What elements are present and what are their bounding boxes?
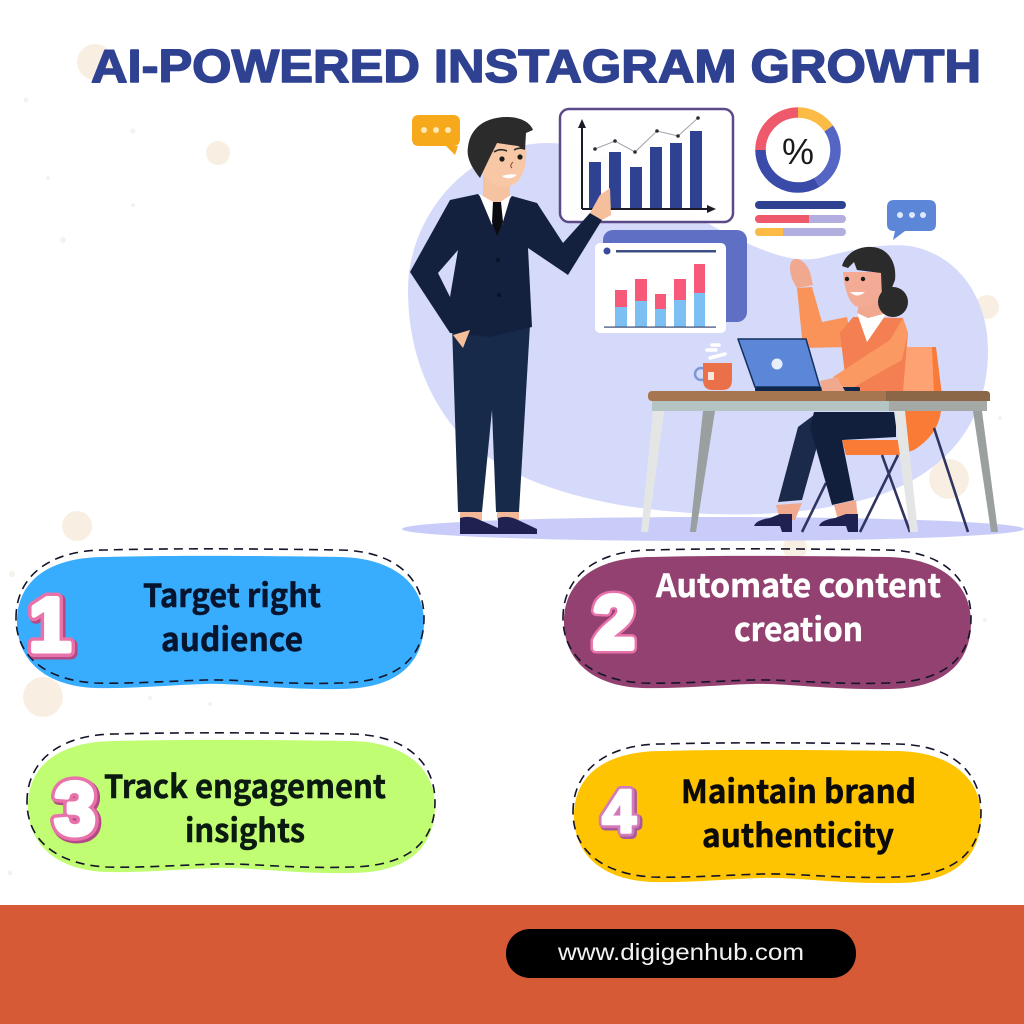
card 2: automate content creation: creation — [734, 605, 863, 651]
card 3: track engagement insights: Track engagement — [104, 762, 386, 808]
card 1: target right audience — [16, 549, 424, 689]
card 4: maintain brand authenticity — [573, 743, 981, 883]
card 1: target right audience: Target right — [143, 571, 321, 617]
progress bars — [755, 201, 846, 236]
card 2: automate content creation: 2 — [593, 581, 635, 664]
background blob — [408, 143, 988, 514]
coffee mug — [695, 345, 732, 390]
laptop — [738, 339, 860, 392]
card 4: maintain brand authenticity: 4 — [604, 780, 638, 847]
desk chair — [802, 347, 968, 532]
card 3: track engagement insights — [27, 733, 435, 873]
ground shadow — [402, 517, 1024, 541]
website pill: www.digigenhub.com — [557, 939, 804, 965]
card 4: maintain brand authenticity: Maintain brand — [681, 767, 916, 813]
speech bubble: orange — [412, 115, 460, 155]
man presenting — [410, 117, 611, 534]
bar chart with trend line — [560, 109, 733, 222]
card 2: automate content creation: Automate content — [655, 561, 941, 607]
card 3: track engagement insights: insights — [185, 806, 305, 852]
card 1: target right audience: 1 — [29, 583, 71, 668]
stacked bar chart panel — [595, 230, 747, 333]
woman at laptop — [754, 247, 908, 532]
card 2: automate content creation — [563, 549, 971, 689]
illustration: presenter and analyst with charts — [402, 109, 1024, 541]
card 1: target right audience: 1 — [29, 583, 71, 668]
footer band — [0, 905, 1024, 1024]
card 4: maintain brand authenticity: 4 — [602, 778, 636, 845]
card 2: automate content creation: 2 — [593, 581, 635, 664]
speech bubble: blue — [887, 200, 936, 240]
desk — [641, 391, 998, 532]
card 4: maintain brand authenticity: 4 — [602, 778, 636, 845]
card 3: track engagement insights: 3 — [56, 769, 98, 852]
card 1: target right audience: audience — [161, 615, 303, 661]
website pill — [506, 929, 856, 978]
donut chart with percent — [760, 112, 836, 188]
card 3: track engagement insights: 3 — [54, 767, 96, 850]
card 1: target right audience: 1 — [31, 585, 73, 670]
title: AI-POWERED INSTAGRAM GROWTH — [91, 40, 981, 92]
card 4: maintain brand authenticity: authenticity — [702, 811, 894, 857]
donut chart with percent: % — [782, 131, 814, 172]
card 3: track engagement insights: 3 — [54, 767, 96, 850]
